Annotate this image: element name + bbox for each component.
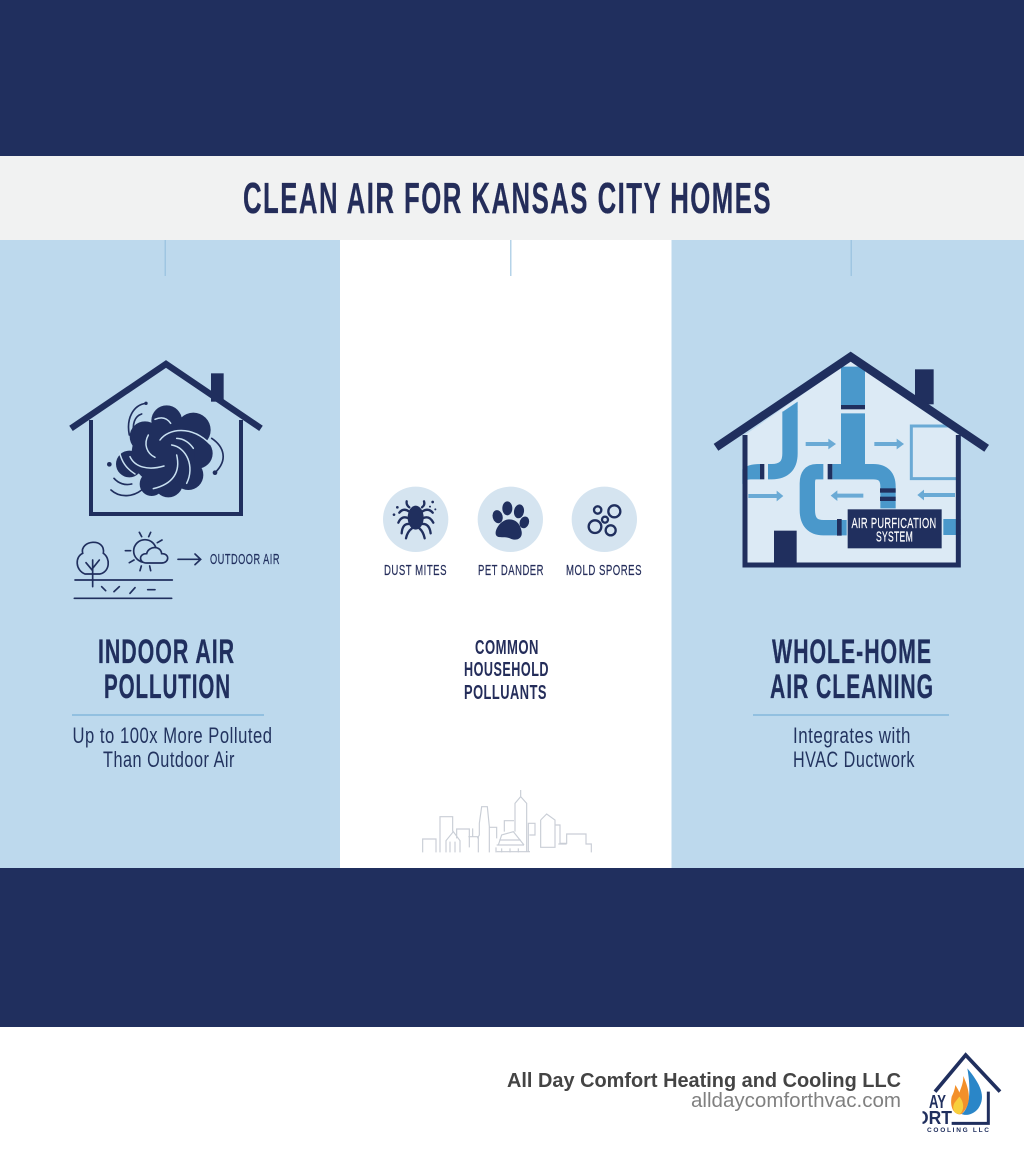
description: indoor air <box>72 723 272 772</box>
icon: paw <box>478 487 543 552</box>
panel: common household pollutants <box>340 240 672 868</box>
description: whole-home <box>793 723 915 772</box>
panel: whole-home air cleaning <box>672 240 1024 868</box>
footer company name: All Day Comfort Heating and Cooling LLC <box>507 1070 901 1092</box>
top navy band <box>0 0 1024 156</box>
description: whole-home: Integrates with <box>793 723 911 748</box>
icon: mold spores <box>572 487 637 552</box>
label: air purification system: SYSTEM <box>876 530 913 546</box>
logo <box>915 1055 1000 1134</box>
icon: Kansas City skyline <box>423 790 591 852</box>
label: air purification system: AIR PURFICATION <box>852 516 936 532</box>
heading: indoor air pollution: POLLUTION <box>104 668 231 706</box>
panel: indoor air pollution <box>0 240 340 868</box>
icon: house with air purification ducts <box>716 357 987 565</box>
pollutant labels <box>384 562 642 579</box>
heading: common household pollutants: POLLUANTS <box>464 682 547 704</box>
label: air purification system <box>852 516 936 546</box>
label: outdoor air: OUTDOOR AIR <box>210 551 280 568</box>
pollutant labels: DUST MITES <box>384 562 447 579</box>
icon: house with pollution cloud <box>71 364 261 514</box>
heading: common household pollutants: COMMON <box>475 637 539 659</box>
pollutant labels: MOLD SPORES <box>566 562 642 579</box>
pollutant labels: PET DANDER <box>478 562 544 579</box>
heading: indoor air pollution: INDOOR AIR <box>98 633 235 671</box>
footer url: alldaycomforthvac.com <box>691 1090 901 1112</box>
logo: ORT <box>915 1108 952 1128</box>
heading: whole-home air cleaning: WHOLE-HOME <box>772 633 932 671</box>
title banner <box>0 156 1024 240</box>
description: indoor air: Up to 100x More Polluted <box>72 723 272 748</box>
logo: COOLING LLC <box>927 1127 989 1134</box>
icon: dust mite <box>383 487 448 552</box>
bottom navy band <box>0 868 1024 1027</box>
icon: outdoor scene <box>74 532 201 598</box>
logo: AY <box>929 1092 946 1112</box>
description: whole-home: HVAC Ductwork <box>793 747 915 772</box>
heading: common household pollutants <box>464 637 549 704</box>
heading: common household pollutants: HOUSEHOLD <box>464 659 549 681</box>
description: indoor air: Than Outdoor Air <box>103 747 235 772</box>
heading: whole-home air cleaning <box>770 633 934 706</box>
heading: indoor air pollution <box>98 633 235 706</box>
